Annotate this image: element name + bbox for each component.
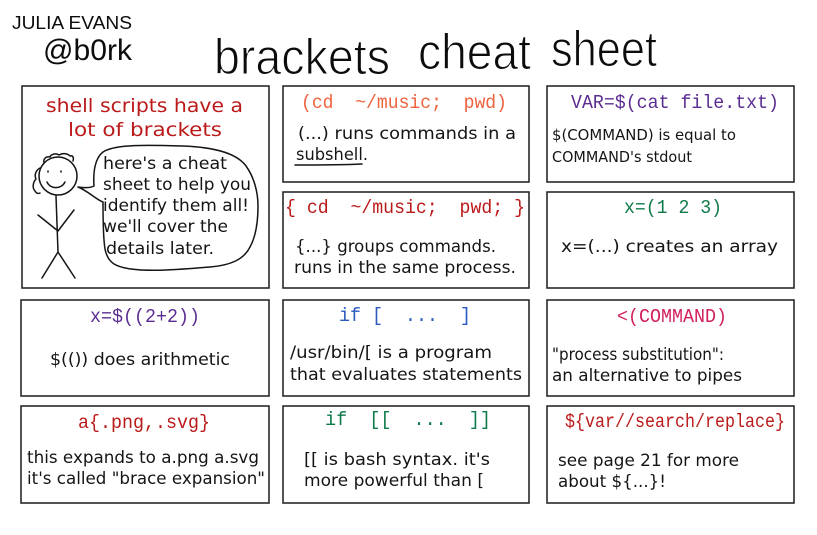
panel: test program xyxy=(283,300,529,396)
panel: intro xyxy=(22,86,269,288)
panel: array: x=(...) creates an array xyxy=(561,237,778,256)
icon: stick figure xyxy=(33,154,77,278)
panel: test program: if [ ... ] xyxy=(339,305,471,327)
panel: command substitution xyxy=(547,86,794,182)
speech bubble: sheet to help you xyxy=(103,175,251,194)
intro heading: shell scripts have a xyxy=(46,95,243,117)
panel: parameter expansion xyxy=(547,406,794,503)
author credit: @b0rk xyxy=(43,34,133,67)
panel: command substitution: VAR=$(cat file.txt) xyxy=(571,92,779,114)
panel: subshell xyxy=(283,86,529,182)
panel: subshell: (cd ~/music; pwd) xyxy=(301,92,507,114)
panel: process substitution: <(COMMAND) xyxy=(617,306,727,328)
speech bubble: details later. xyxy=(106,239,214,258)
panel: command substitution: COMMAND's stdout xyxy=(552,148,692,166)
panel: command group: { cd ~/music; pwd; } xyxy=(285,197,525,219)
intro heading xyxy=(46,95,243,141)
panel: brace expansion: this expands to a.png a.svg xyxy=(27,448,259,467)
title: cheat xyxy=(418,24,531,80)
title xyxy=(214,21,657,85)
speech bubble: here's a cheat xyxy=(103,154,228,173)
panel: bash test: if [[ ... ]] xyxy=(325,409,491,431)
panel: parameter expansion: see page 21 for more xyxy=(558,451,739,470)
panel: parameter expansion: ${var//search/replace} xyxy=(565,411,785,433)
panel: brace expansion: a{.png,.svg} xyxy=(78,412,210,434)
author credit xyxy=(12,13,133,67)
intro heading: lot of brackets xyxy=(68,119,222,141)
panel: array xyxy=(547,192,794,288)
panel: process substitution: an alternative to pipes xyxy=(552,366,742,385)
panel: subshell: subshell. xyxy=(296,145,368,164)
panel: process substitution xyxy=(547,300,794,396)
panel: brace expansion: it's called "brace expansion" xyxy=(27,469,265,488)
panel: command substitution: $(COMMAND) is equal to xyxy=(552,126,736,144)
panel: process substitution: "process substitution": xyxy=(552,345,724,364)
panel: arithmetic: $(()) does arithmetic xyxy=(50,350,230,369)
panel: subshell: (...) runs commands in a xyxy=(298,124,516,143)
panel: bash test xyxy=(283,406,529,503)
panel: bash test: [[ is bash syntax. it's xyxy=(304,450,490,469)
panel: command group xyxy=(283,192,529,288)
title: brackets xyxy=(214,29,390,85)
author credit: JULIA EVANS xyxy=(12,13,132,33)
speech bubble: we'll cover the xyxy=(103,217,228,236)
panel: bash test: more powerful than [ xyxy=(304,471,484,490)
panel: command group: {...} groups commands. xyxy=(295,237,496,256)
speech bubble xyxy=(78,145,258,270)
title: sheet xyxy=(551,21,657,77)
panel: test program: /usr/bin/[ is a program xyxy=(290,343,492,362)
panel: array: x=(1 2 3) xyxy=(624,197,722,219)
panel: arithmetic: x=$((2+2)) xyxy=(90,306,200,328)
panel: command group: runs in the same process. xyxy=(294,258,516,277)
speech bubble: identify them all! xyxy=(103,196,249,215)
panel: brace expansion xyxy=(21,406,269,503)
panel: test program: that evaluates statements xyxy=(290,365,522,384)
panel: arithmetic xyxy=(21,300,269,396)
panel: parameter expansion: about ${...}! xyxy=(558,472,666,491)
